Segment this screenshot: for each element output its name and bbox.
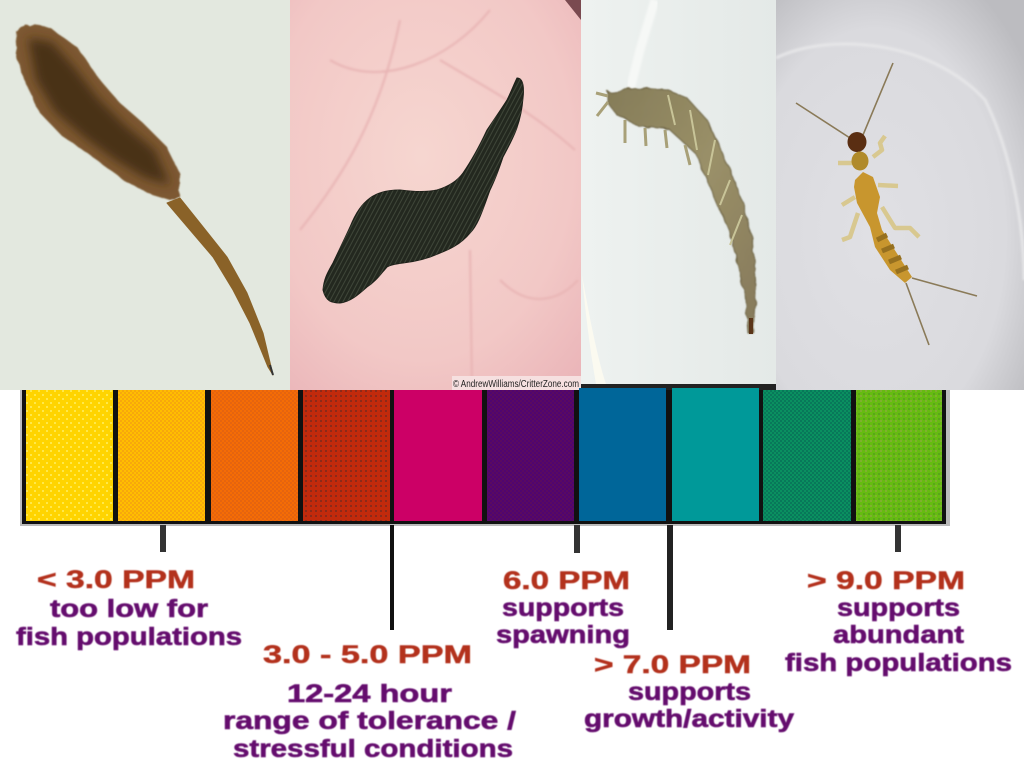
label: above 7 ppm: growth/activity	[584, 705, 794, 733]
label: above 9 ppm: > 9.0 PPM	[807, 567, 965, 595]
colour band: magenta	[394, 390, 482, 521]
label: 3 to 5 ppm: 12-24 hour	[287, 680, 452, 708]
label: above 9 ppm	[785, 567, 1012, 677]
label: above 9 ppm: fish populations	[785, 649, 1012, 677]
photo: worm-like larva with long tail	[0, 0, 290, 390]
label: above 9 ppm: supports	[837, 594, 960, 622]
photo: segmented pale larva	[581, 0, 776, 385]
label: 3 to 5 ppm: stressful conditions	[233, 735, 513, 763]
colour band: purple	[487, 390, 574, 521]
label: less than 3 ppm	[16, 566, 242, 651]
label: above 9 ppm: abundant	[833, 621, 965, 649]
photo: black leech on a palm	[290, 0, 581, 390]
photo: stonefly nymph in white dish	[776, 0, 1024, 390]
label: 3 to 5 ppm: 3.0 - 5.0 PPM	[263, 641, 472, 669]
tick: 3 to 5 ppm	[390, 525, 394, 630]
colour band: teal	[672, 388, 759, 521]
label: 6 ppm: supports	[502, 594, 624, 622]
colour band: amber	[118, 390, 205, 521]
label: 6 ppm	[496, 567, 630, 649]
colour band: lime	[856, 390, 942, 521]
label: 6 ppm: spawning	[496, 621, 630, 649]
photo credit: © AndrewWilliams/CritterZone.com	[453, 379, 579, 390]
label: 3 to 5 ppm: range of tolerance /	[223, 707, 516, 735]
colour band: blue	[579, 388, 666, 521]
colour band: green	[763, 390, 851, 521]
label: less than 3 ppm: fish populations	[16, 623, 242, 651]
tick: above 7 ppm	[667, 525, 673, 630]
colour band: yellow	[26, 390, 113, 521]
label: above 7 ppm: > 7.0 PPM	[594, 651, 751, 679]
photo credit	[452, 376, 581, 390]
colour band: brick red	[303, 390, 390, 521]
tick: below 3 ppm	[160, 525, 166, 552]
bar chart: dissolved oxygen colour scale	[20, 384, 950, 526]
label: above 7 ppm: supports	[628, 678, 751, 706]
label: less than 3 ppm: < 3.0 PPM	[37, 566, 195, 594]
label: less than 3 ppm: too low for	[50, 595, 208, 623]
top edge above blue and teal bands	[581, 384, 776, 390]
colour band: orange	[211, 390, 298, 521]
tick: 6 ppm	[574, 525, 580, 553]
tick: above 9 ppm	[895, 525, 901, 552]
label: above 7 ppm	[584, 651, 794, 733]
label: 6 ppm: 6.0 PPM	[503, 567, 630, 595]
label: 3 to 5 ppm	[223, 641, 516, 763]
